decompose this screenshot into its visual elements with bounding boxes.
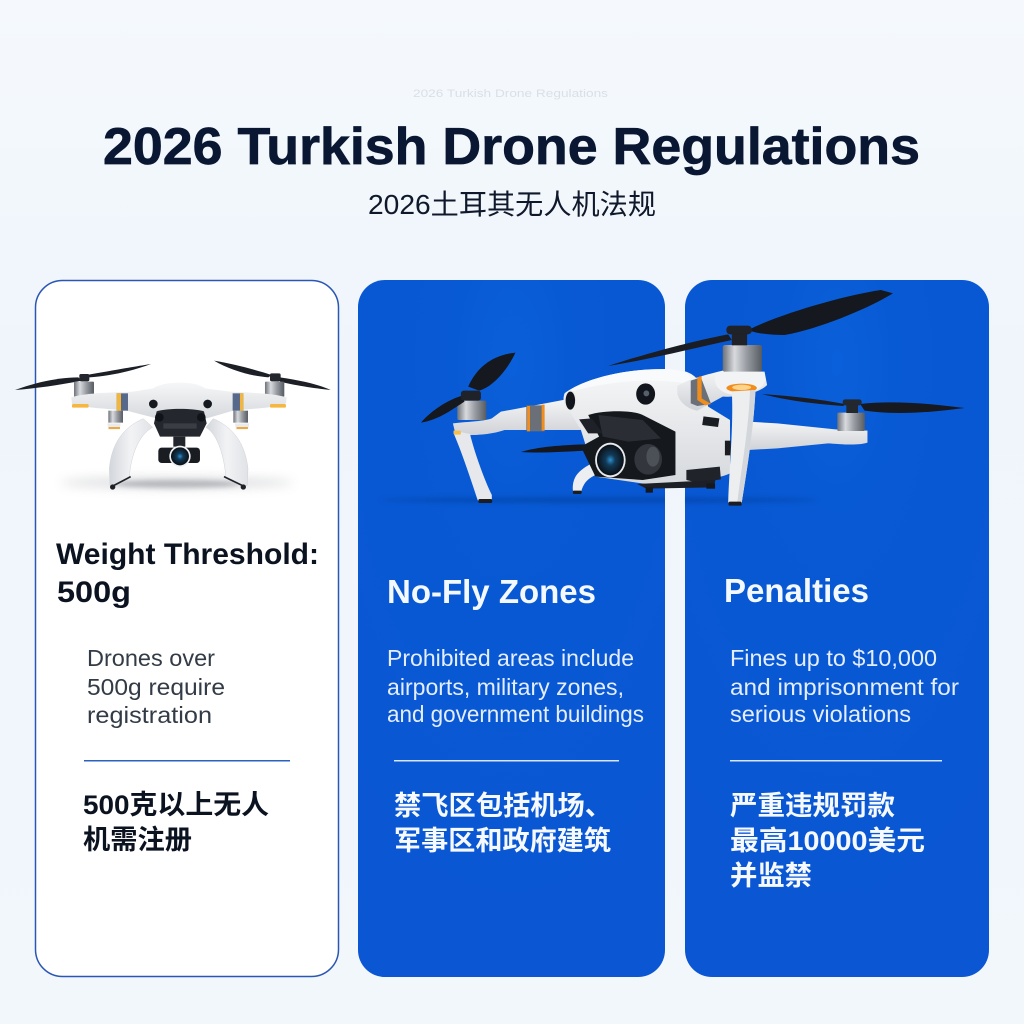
- chinese text: penalties: 严重违规罚款: [730, 791, 895, 821]
- body text: penalties: Fines up to $10,000: [730, 645, 937, 671]
- chinese text: no-fly zones: [394, 791, 612, 856]
- heading: weight threshold: [56, 538, 319, 609]
- gimbal camera: [173, 437, 185, 447]
- panel: no-fly zones: [358, 280, 665, 977]
- chinese text: penalties: [730, 791, 925, 891]
- chinese text: penalties: 最高10000美元: [730, 826, 925, 856]
- icon: white front-view drone: [15, 361, 331, 490]
- faint overline caption: 2026 Turkish Drone Regulations: [413, 88, 609, 100]
- rear motors: [108, 411, 123, 423]
- camera lens: [595, 443, 626, 477]
- ground shadow: [381, 497, 817, 503]
- body text: weight threshold: registration: [87, 702, 212, 728]
- title: 2026 Turkish Drone Regulations: [103, 118, 920, 176]
- far arm propeller: [521, 444, 585, 453]
- main body: [564, 369, 730, 484]
- panel: weight threshold: [36, 280, 338, 976]
- chinese text: no-fly zones: 军事区和政府建筑: [394, 826, 611, 856]
- body text: penalties: and imprisonment for: [730, 674, 959, 700]
- propellers: [15, 377, 82, 390]
- body text: no-fly zones: airports, military zones,: [387, 674, 624, 700]
- icon: large blue-panel drone: [381, 290, 965, 506]
- chinese text: no-fly zones: 禁飞区包括机场、: [394, 791, 612, 821]
- body text: weight threshold: Drones over: [87, 645, 215, 671]
- chinese text: weight threshold: 机需注册: [83, 825, 192, 855]
- camera gimbal housing: [581, 411, 675, 480]
- subtitle: 2026土耳其无人机法规: [368, 189, 656, 220]
- rear landing leg: [573, 463, 595, 493]
- body text: penalties: [730, 645, 959, 727]
- heading: weight threshold: Weight Threshold:: [56, 538, 319, 571]
- heading: no-fly zones: No-Fly Zones: [387, 573, 596, 610]
- left arm: [453, 399, 581, 435]
- body text: penalties: serious violations: [730, 701, 911, 727]
- chinese text: penalties: 并监禁: [730, 861, 812, 891]
- panel: penalties: [685, 280, 989, 977]
- landing legs: [109, 419, 153, 487]
- front motors: [74, 382, 94, 397]
- body text: no-fly zones: and government buildings: [387, 701, 644, 727]
- body text: no-fly zones: Prohibited areas include: [387, 645, 634, 671]
- body text: weight threshold: 500g require: [87, 674, 225, 700]
- glowing lamp and front leg: [726, 384, 757, 392]
- heading: weight threshold: 500g: [57, 576, 131, 609]
- rear right arm and motor: [748, 422, 867, 450]
- chinese text: weight threshold: [83, 790, 269, 855]
- top-right arm and motor: [677, 371, 767, 411]
- body text: weight threshold: [87, 645, 225, 728]
- chinese text: weight threshold: 500克以上无人: [83, 790, 269, 820]
- body text: no-fly zones: [387, 645, 644, 727]
- arms and body: [71, 383, 287, 418]
- heading: penalties: Penalties: [724, 572, 869, 609]
